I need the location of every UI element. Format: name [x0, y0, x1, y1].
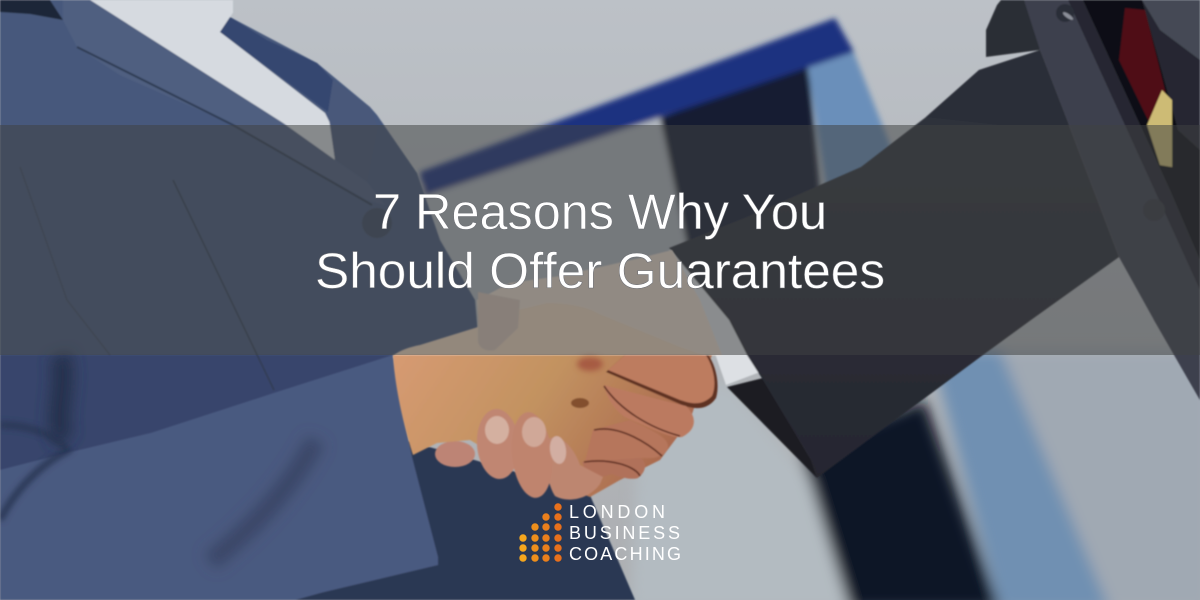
logo wordmark: [569, 502, 681, 564]
pinky under wrist: [435, 441, 475, 467]
sleeve: [669, 50, 1119, 478]
handshake hands: [393, 250, 722, 500]
left person: blue suit jacket: [0, 0, 635, 600]
knuckle marks: [577, 357, 603, 371]
right person: dark suit and sleeve: [669, 0, 1200, 478]
lower pale floor: [630, 385, 850, 600]
tie red stripe: [1119, 8, 1165, 130]
pale wall under band: [420, 110, 700, 300]
lower palm: [393, 355, 712, 497]
light blue door edge: [806, 48, 900, 210]
jacket button: [362, 208, 392, 238]
finger four: [582, 458, 645, 480]
lower body shade: [295, 440, 635, 600]
inner lapel: [328, 80, 378, 182]
logo wordmark: LONDON: [569, 502, 665, 522]
shirt cuff: [669, 240, 760, 385]
outer lapel: [63, 0, 385, 205]
jacket body: [0, 0, 635, 600]
title: Should Offer Guarantees: [315, 243, 885, 299]
neck: [150, 0, 178, 14]
under cuff fold: [727, 378, 817, 478]
upper right jacket panel: [1142, 0, 1200, 60]
finger one: [606, 355, 718, 408]
inner jacket and shirt dark: [1068, 0, 1200, 400]
tie beige stripe: [1147, 90, 1172, 167]
lapel strip: [1024, 0, 1200, 400]
title: 7 Reasons Why You: [373, 184, 827, 240]
top collar shadow: [0, 0, 63, 20]
jacket seams: [173, 180, 274, 390]
upper hand back: [477, 250, 722, 360]
second hand upper wrist: [393, 303, 712, 358]
translucent title band: [0, 125, 1200, 355]
finger three: [585, 420, 668, 462]
finger two: [604, 385, 694, 437]
logo wordmark: BUSINESS: [569, 523, 680, 543]
gripping fingers: [475, 408, 603, 500]
lower light blue strip: [930, 350, 1110, 600]
white shirt: [90, 0, 335, 160]
logo: London Business Coaching: [519, 502, 681, 564]
navy door frame: [420, 18, 854, 196]
logo dot pyramid icon: [519, 503, 562, 562]
dark door recess: [660, 60, 825, 260]
sleeve: [0, 355, 438, 600]
shoulder fold: [986, 0, 1040, 57]
title: [315, 184, 885, 299]
lower right wall: [985, 350, 1200, 600]
logo wordmark: COACHING: [569, 544, 681, 564]
sleeve folds: [210, 440, 316, 562]
thumb: [478, 292, 520, 351]
tie: [220, 17, 333, 112]
lower navy column: [800, 400, 1000, 600]
